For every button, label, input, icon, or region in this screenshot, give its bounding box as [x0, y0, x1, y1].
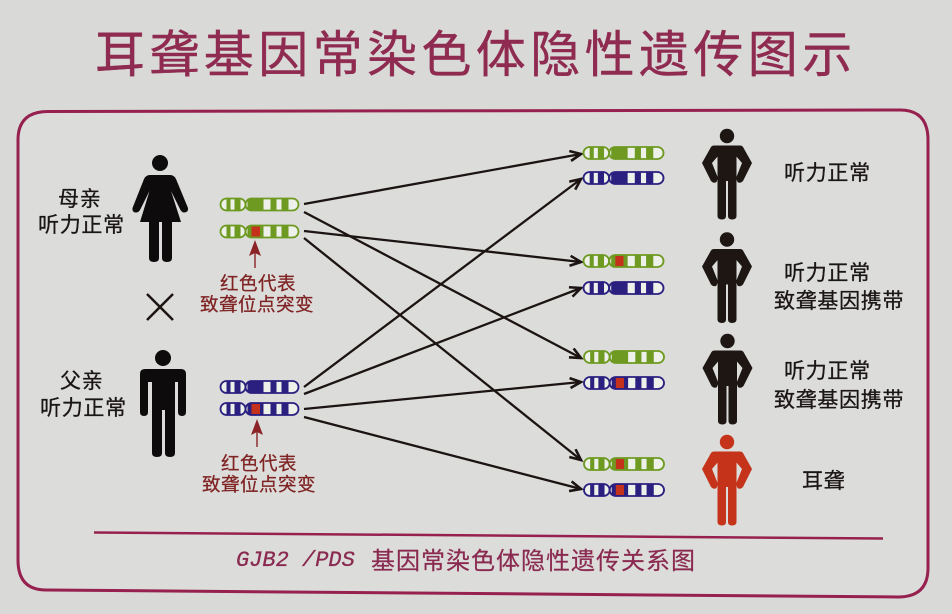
label: mother mutation note	[200, 273, 314, 315]
label: father: 父亲	[60, 370, 103, 393]
icon: father figure	[140, 350, 186, 457]
label: child 2: 致聋基因携带	[774, 290, 904, 313]
label: mother: 母亲	[58, 188, 101, 211]
panel: diagram frame	[18, 110, 928, 597]
label: child 1: 听力正常	[784, 162, 871, 185]
label: child 3: 听力正常	[784, 360, 871, 383]
label: mother mutation note: 红色代表	[220, 273, 296, 294]
arrows: inheritance lines	[304, 154, 581, 489]
label: father mutation note: 红色代表	[221, 453, 297, 474]
label: child 4: 耳聋	[802, 470, 845, 493]
chromosomes: mother	[220, 198, 298, 238]
icon: child 4 deaf	[702, 435, 752, 526]
label: father	[40, 370, 127, 420]
chromosomes: child 4	[584, 458, 664, 496]
caption: 基因常染色体隐性遗传关系图	[371, 548, 696, 575]
label: mother: 听力正常	[38, 214, 125, 237]
label: child 3	[774, 360, 904, 412]
divider line	[94, 532, 883, 538]
label: child 2: 听力正常	[784, 262, 871, 285]
label: mother	[38, 188, 125, 237]
icon: child 1 normal	[702, 129, 752, 220]
chromosomes: child 3	[584, 351, 664, 389]
label: father: 听力正常	[40, 397, 127, 420]
arrow: mother mutation pointer	[249, 240, 261, 268]
icon: child 3 carrier	[702, 334, 752, 424]
chromosomes: child 1	[584, 147, 664, 184]
label: father mutation note	[202, 453, 316, 495]
arrow: father mutation pointer	[251, 419, 263, 447]
label: mother mutation note: 致聋位点突变	[200, 294, 314, 315]
label: child 3: 致聋基因携带	[774, 389, 904, 412]
chromosomes: father	[220, 381, 298, 415]
icon: mother figure	[132, 155, 188, 262]
caption: GJB2 /PDS	[236, 548, 355, 573]
chromosomes: child 2	[584, 255, 664, 294]
label: father mutation note: 致聋位点突变	[202, 474, 316, 495]
title: 耳聋基因常染色体隐性遗传图示	[95, 27, 857, 83]
label: child 2	[774, 262, 904, 313]
icon: child 2 carrier	[702, 232, 752, 323]
icon: cross symbol	[147, 294, 173, 320]
